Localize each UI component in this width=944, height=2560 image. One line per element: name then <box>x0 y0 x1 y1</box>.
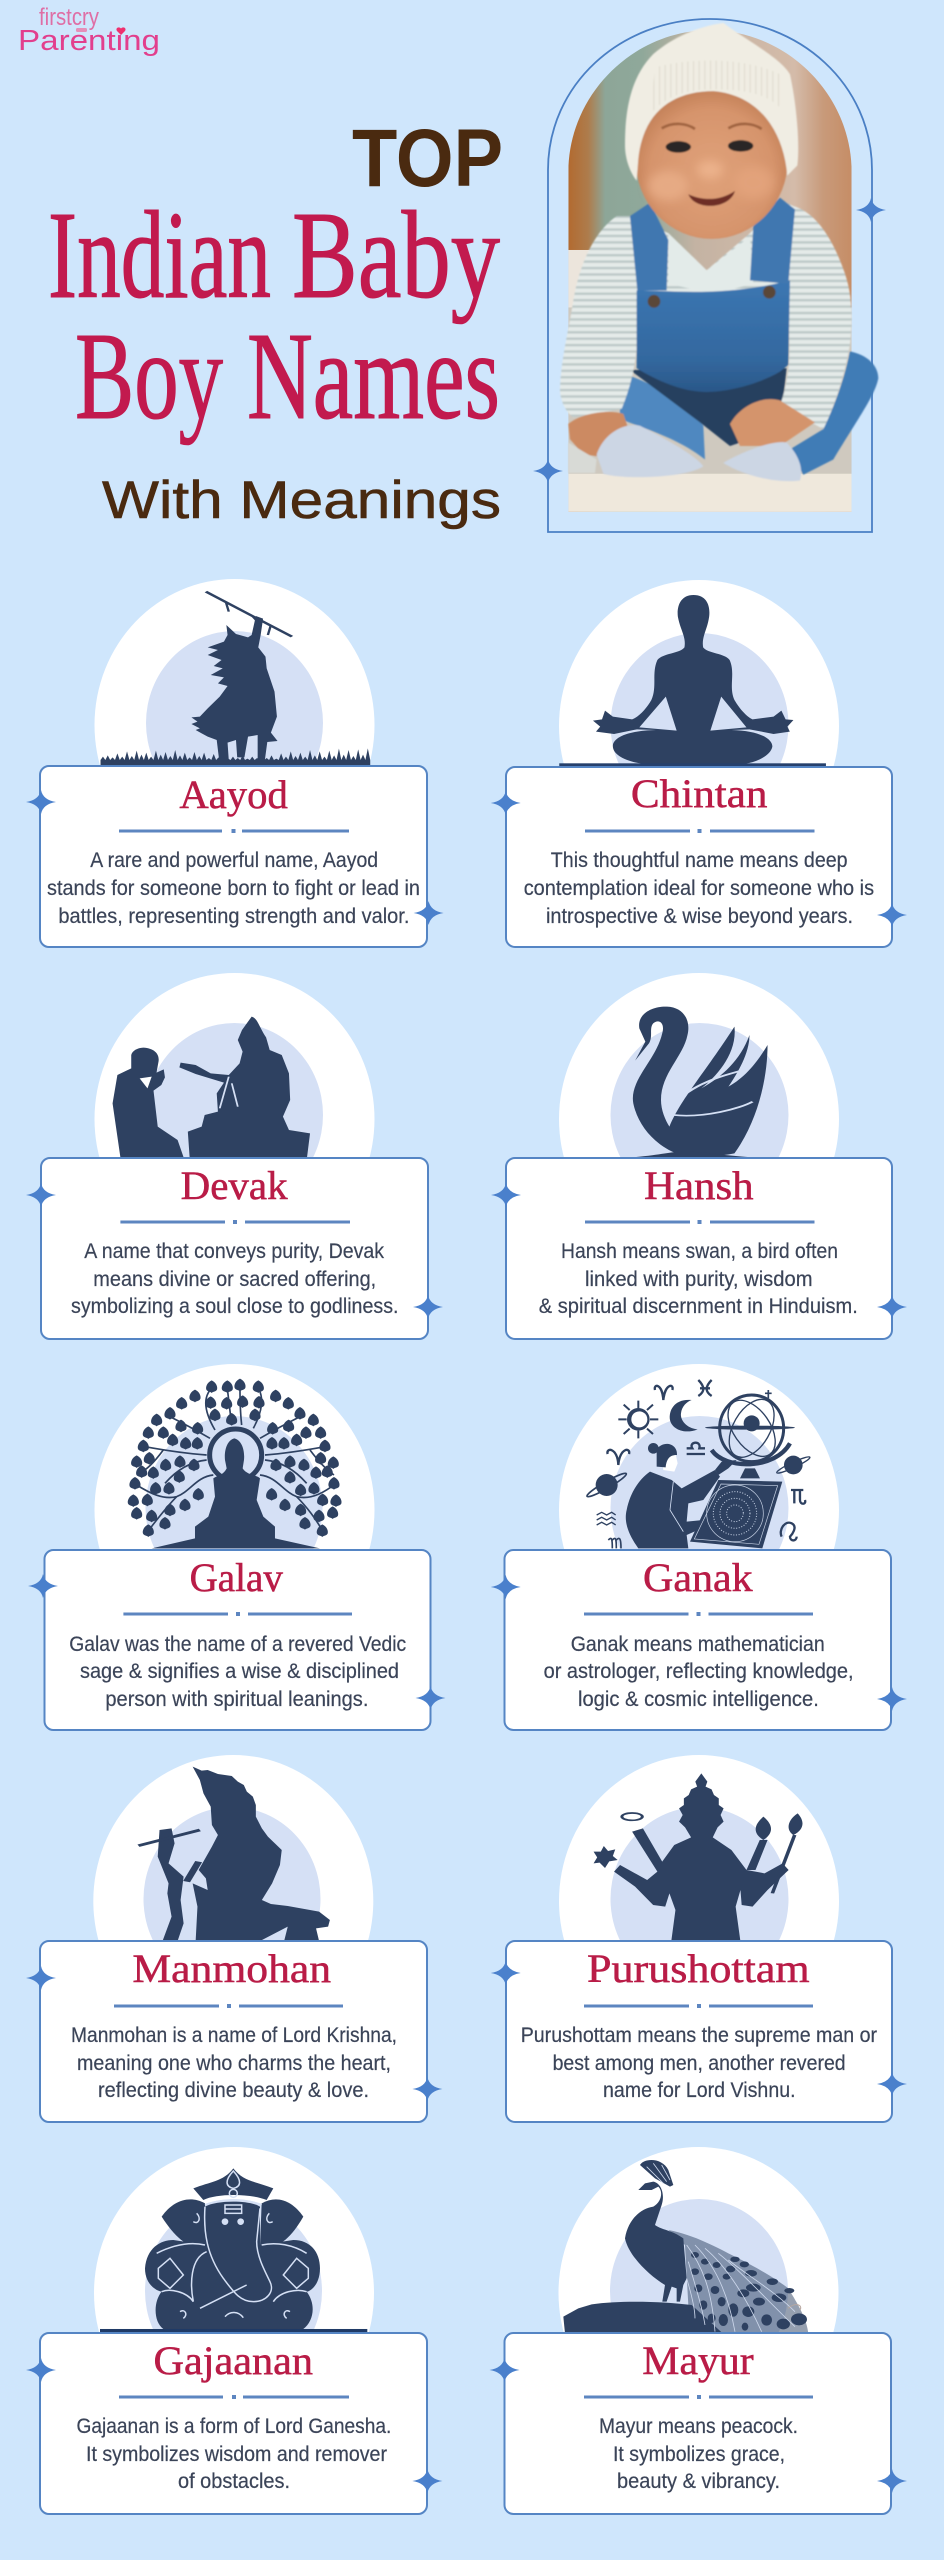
description: sage & signifies a wise & disciplined <box>80 1660 399 1683</box>
name heading: Hansh <box>644 1163 754 1208</box>
description: or astrologer, reflecting knowledge, <box>544 1660 854 1683</box>
description: logic & cosmic intelligence. <box>578 1688 819 1711</box>
icon backdrop <box>94 2147 374 2439</box>
description <box>599 2415 798 2493</box>
divider <box>584 2395 813 2399</box>
description <box>47 849 420 928</box>
jeans legs <box>620 373 705 460</box>
description: introspective & wise beyond years. <box>546 905 853 928</box>
name heading: Purushottam <box>587 1946 810 1991</box>
sparkle right <box>877 1687 907 1711</box>
icon backdrop <box>559 1755 839 2047</box>
sparkle right <box>416 1686 446 1710</box>
description: symbolizing a soul close to godliness. <box>71 1295 398 1318</box>
card <box>40 766 427 947</box>
sparkle right <box>877 2469 907 2493</box>
description: Purushottam means the supreme man or <box>521 2024 877 2047</box>
sparkle right <box>877 1295 907 1319</box>
icon: devotee before sage <box>113 1017 310 1157</box>
card <box>40 2333 427 2514</box>
description: It symbolizes wisdom and remover <box>86 2443 387 2466</box>
sparkle <box>856 198 886 222</box>
socks <box>568 443 597 473</box>
head <box>636 82 788 239</box>
description <box>544 1633 854 1711</box>
title line: Boy Names <box>75 308 500 446</box>
description: name for Lord Vishnu. <box>603 2079 796 2102</box>
divider <box>119 829 349 833</box>
description: best among men, another revered <box>553 2052 846 2075</box>
title line: With Meanings: With Meanings <box>102 471 501 530</box>
nose <box>697 161 723 178</box>
card <box>506 1941 892 2122</box>
description: battles, representing strength and valor. <box>58 905 409 928</box>
description: A rare and powerful name, Aayod <box>90 849 378 872</box>
panel: Chintan <box>491 580 907 947</box>
icon backdrop <box>94 579 374 871</box>
icon backdrop <box>559 973 839 1265</box>
divider <box>123 1612 352 1616</box>
divider <box>120 1220 350 1224</box>
description: means divine or sacred offering, <box>93 1268 376 1291</box>
name heading: Devak <box>181 1163 288 1208</box>
sparkle left <box>26 790 56 814</box>
icon: astrologer with armillary sphere <box>585 1380 811 1548</box>
overalls bib <box>637 280 790 392</box>
description: A name that conveys purity, Devak <box>84 1240 385 1263</box>
card <box>506 1158 892 1339</box>
panel: Hansh <box>491 973 907 1339</box>
arch frame <box>548 19 872 532</box>
card <box>44 1550 430 1730</box>
sparkle right <box>412 2077 442 2101</box>
description: Hansh means swan, a bird often <box>561 1240 838 1263</box>
description <box>539 1240 858 1318</box>
description: reflecting divine beauty & love. <box>98 2079 369 2102</box>
panel: Manmohan <box>26 1755 442 2122</box>
description: & spiritual discernment in Hinduism. <box>539 1295 858 1318</box>
icon: Ganesha <box>100 2168 367 2334</box>
card <box>504 1550 891 1730</box>
sparkle right <box>413 1295 443 1319</box>
icon: warrior on horse <box>101 592 370 765</box>
description <box>69 1633 406 1711</box>
name heading: Galav <box>190 1555 283 1600</box>
icon: four-armed Vishnu <box>594 1773 803 1942</box>
icon: Krishna with flute <box>138 1767 330 1941</box>
description: linked with purity, wisdom <box>585 1268 813 1291</box>
description <box>524 849 874 928</box>
card <box>506 767 892 947</box>
description: beauty & vibrancy. <box>617 2470 780 2493</box>
sparkle <box>533 459 563 483</box>
card <box>504 2333 891 2514</box>
panel: Purushottam <box>491 1755 907 2122</box>
logo: FirstCry Parenting <box>18 4 160 57</box>
divider <box>119 2395 349 2399</box>
description: This thoughtful name means deep <box>551 849 848 872</box>
sparkle left <box>491 1961 521 1985</box>
name heading: Mayur <box>642 2338 754 2383</box>
title <box>48 113 503 530</box>
straps <box>630 203 668 291</box>
description: of obstacles. <box>178 2470 290 2493</box>
name heading: Gajaanan <box>154 2338 313 2383</box>
logo: FirstCry Parenting: Parenting <box>18 25 160 57</box>
sparkle left <box>491 791 521 815</box>
divider <box>584 1612 813 1616</box>
description <box>76 2415 391 2493</box>
icon backdrop <box>558 2147 838 2439</box>
divider <box>585 1220 814 1224</box>
divider <box>585 829 814 833</box>
sparkle left <box>491 1183 521 1207</box>
panel: Aayod <box>26 579 444 947</box>
icon: meditating figure <box>559 595 826 767</box>
mouth <box>688 191 735 206</box>
icon: Buddha under bodhi tree <box>128 1379 342 1548</box>
panel: Ganak <box>491 1364 907 1730</box>
eyes <box>666 141 691 153</box>
panel: Devak <box>26 973 443 1339</box>
name heading: Chintan <box>631 771 768 816</box>
icon backdrop <box>559 580 839 872</box>
sparkle right <box>412 2469 442 2493</box>
cheeks <box>648 171 688 201</box>
sparkle left <box>26 1966 56 1990</box>
sparkle right <box>414 901 444 925</box>
icon backdrop <box>94 973 374 1265</box>
buttons <box>648 295 660 308</box>
description: contemplation ideal for someone who is <box>524 877 874 900</box>
description: Ganak means mathematician <box>571 1633 825 1656</box>
title line: TOP: TOP <box>352 113 503 204</box>
description: Mayur means peacock. <box>599 2415 798 2438</box>
title line: Boy Names: Boy <box>75 308 223 446</box>
sparkle left <box>491 1575 521 1599</box>
description: Manmohan is a name of Lord Krishna, <box>71 2024 397 2047</box>
sparkle right <box>877 903 907 927</box>
sparkle right <box>877 2072 907 2096</box>
baby picture <box>560 23 878 513</box>
title line: Indian Baby: Baby <box>292 187 500 325</box>
shirt <box>560 216 637 417</box>
icon backdrop <box>94 1364 374 1656</box>
description: person with spiritual leanings. <box>105 1688 368 1711</box>
logo: FirstCry Parenting: firstcry <box>39 4 99 31</box>
description: stands for someone born to fight or lead in <box>47 877 420 900</box>
icon: peacock <box>563 2160 808 2333</box>
name heading: Aayod <box>179 772 288 817</box>
panel: Mayur <box>490 2147 907 2514</box>
panel: Galav <box>28 1364 446 1730</box>
description: It symbolizes grace, <box>613 2443 785 2466</box>
icon backdrop <box>559 1364 839 1656</box>
icon: swan <box>632 1007 768 1157</box>
description: meaning one who charms the heart, <box>77 2052 391 2075</box>
panel: Gajaanan <box>26 2147 442 2514</box>
title line: Boy Names: Names <box>247 308 500 446</box>
sparkle left <box>28 1574 58 1598</box>
sparkle left <box>26 2358 56 2382</box>
title line: Indian Baby: Indian <box>48 187 271 325</box>
sparkle left <box>26 1183 56 1207</box>
icon backdrop <box>93 1755 373 2047</box>
card <box>40 1941 427 2122</box>
description <box>71 1240 398 1318</box>
face <box>662 1454 678 1472</box>
name heading: Ganak <box>643 1555 753 1600</box>
divider <box>114 2004 343 2008</box>
name heading: Manmohan <box>132 1946 331 1991</box>
description: Gajaanan is a form of Lord Ganesha. <box>76 2415 391 2438</box>
description <box>71 2024 397 2102</box>
divider <box>584 2004 813 2008</box>
card <box>41 1158 428 1339</box>
hat <box>625 23 798 181</box>
description: Galav was the name of a revered Vedic <box>69 1633 406 1656</box>
description <box>521 2024 877 2102</box>
sparkle left <box>490 2358 520 2382</box>
hands <box>568 412 627 456</box>
photo: smiling baby in arch frame <box>533 19 886 532</box>
